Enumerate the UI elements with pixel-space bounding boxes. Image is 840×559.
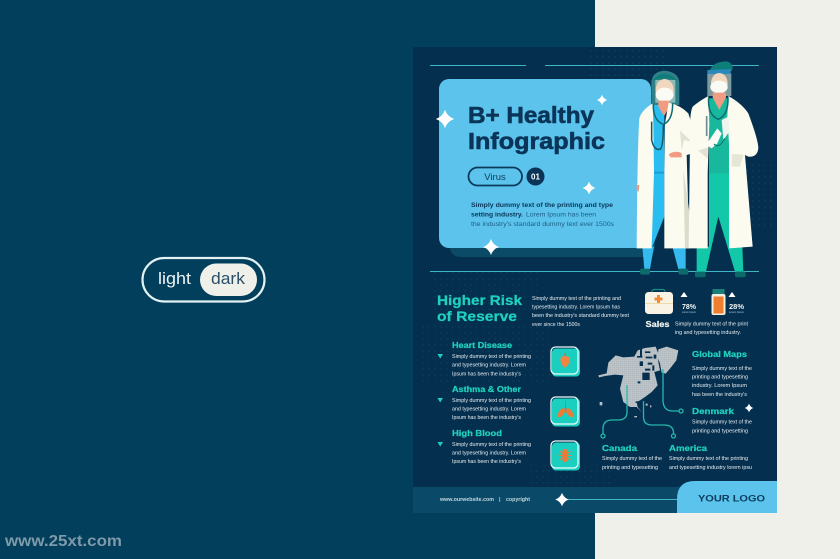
section rule [430,271,759,272]
connector: denmark [663,369,683,413]
text: global maps [692,349,752,398]
text: global maps: industry. Lorem Ipsum [692,383,748,389]
intro paragraph: been the industry's standard dummy text [532,313,629,319]
list item: asthma: Simply dummy text of the printing [452,398,531,404]
text: america: America [669,443,707,453]
text: america: and typesetting industry lorem ipsu [669,465,752,471]
icon: blood cell [551,441,580,470]
map: north america dotted [598,347,678,417]
intro paragraph: Simply dummy text of the printing and [532,296,621,302]
text: canada: printing and typesetting [602,465,658,471]
doctor left [637,71,707,275]
title: B+ Healthy [468,102,594,128]
connector: america [644,401,676,438]
icon: medicine jar [712,289,726,315]
sales label: Sales [646,319,670,329]
stat: 78%: Lorem Ipsum [682,311,696,314]
list item: asthma: Asthma & Other [452,384,522,394]
footer website text [439,497,530,503]
heading: Higher Risk of Reserve: Higher Risk [437,292,522,308]
footer bar [413,481,777,513]
icon: heart [551,347,580,376]
stat: 28%: 28% [729,304,745,311]
badge: 01: 01 [531,172,540,182]
text: denmark: Simply dummy text of the [692,420,752,426]
text: canada: Simply dummy text of the [602,456,662,462]
text: global maps: Global Maps [692,349,747,359]
card description: Simply dummy text of the printing and type [471,202,614,209]
card shadow [450,100,655,257]
star [483,239,499,255]
text: global maps: Simply dummy text of the [692,366,752,372]
icon: lungs [551,397,580,426]
hero card [439,79,651,248]
sales text [675,322,749,336]
list item: high blood [438,428,531,465]
doctor right [689,61,758,277]
background: right light panel [595,0,840,559]
text: global maps: has been the industry's [692,392,747,398]
stat: 78% [680,292,697,314]
list item: high blood: High Blood [452,428,502,438]
list item: high blood: Ipsum has been the industry's [452,459,521,465]
star [597,95,607,105]
text: denmark: printing and typesetting [692,428,748,434]
text: america [669,443,752,471]
pill: virus [468,168,522,186]
badge: 01 [526,168,544,186]
text: denmark [692,406,752,434]
star [745,404,753,412]
footer website text: | [499,497,501,503]
connector: canada [601,385,627,438]
list item: asthma: and typesetting industry. Lorem [452,406,527,412]
list item: high blood: and typesetting industry. Lorem [452,450,527,456]
stat: 28%: Lorem Ipsum [729,311,744,314]
footer rule [562,499,680,500]
stat: 78%: 78% [682,304,697,311]
intro paragraph: typesetting industry. Lorem Ipsum has [532,304,620,310]
text: global maps: printing and typesetting [692,374,748,380]
heading: Higher Risk of Reserve [437,292,522,324]
card description: Lorem Ipsum has been [526,212,597,218]
logo tab [677,481,777,513]
list item: heart disease: Heart Disease [452,340,512,350]
icon: first aid kit [645,290,673,314]
list item: asthma [438,384,531,421]
header rule left [430,65,526,66]
star [583,182,595,194]
list item: heart disease [438,340,531,378]
text: america: Simply dummy text of the printing [669,456,748,462]
intro paragraph: ever since the 1500s [532,322,580,328]
title [468,102,605,154]
poster [413,47,777,513]
footer website text: www.ourwebsite.com [439,497,494,503]
star [436,110,454,128]
text: canada [602,443,662,471]
sales text: ing and typesetting industry. [675,330,741,336]
list item: heart disease: Simply dummy text of the printing [452,354,531,360]
logo tab: YOUR LOGO [698,494,765,504]
pill: virus: Virus [484,172,506,183]
card description: setting industry. [471,212,523,218]
star [555,493,569,506]
card description: the industry's standard dummy text ever 1500s [471,221,614,228]
list item: high blood: Simply dummy text of the printing [452,442,531,448]
card description [471,202,614,228]
toggle: light dark: dark [211,269,246,288]
list item: asthma: Ipsum has been the industry's [452,415,521,421]
list item: heart disease: and typesetting industry. Lorem [452,362,527,368]
list item: heart disease: Ipsum has been the industry's [452,372,521,378]
sales text: Simply dummy text of the print [675,322,749,328]
toggle: light dark [142,258,264,302]
heading: Higher Risk of Reserve: of Reserve [437,308,517,324]
text: denmark: Denmark [692,406,734,416]
text: canada: Canada [602,443,637,453]
stat: 28% [728,292,745,314]
header rule right [545,65,759,66]
illustration: two doctors [637,61,758,277]
toggle: light dark: light [158,269,191,288]
watermark: www.25xt.com [4,533,122,550]
intro paragraph [532,296,629,328]
title: Infographic [468,128,605,154]
footer website text: copyright [506,497,530,503]
background: left navy panel [0,0,595,559]
